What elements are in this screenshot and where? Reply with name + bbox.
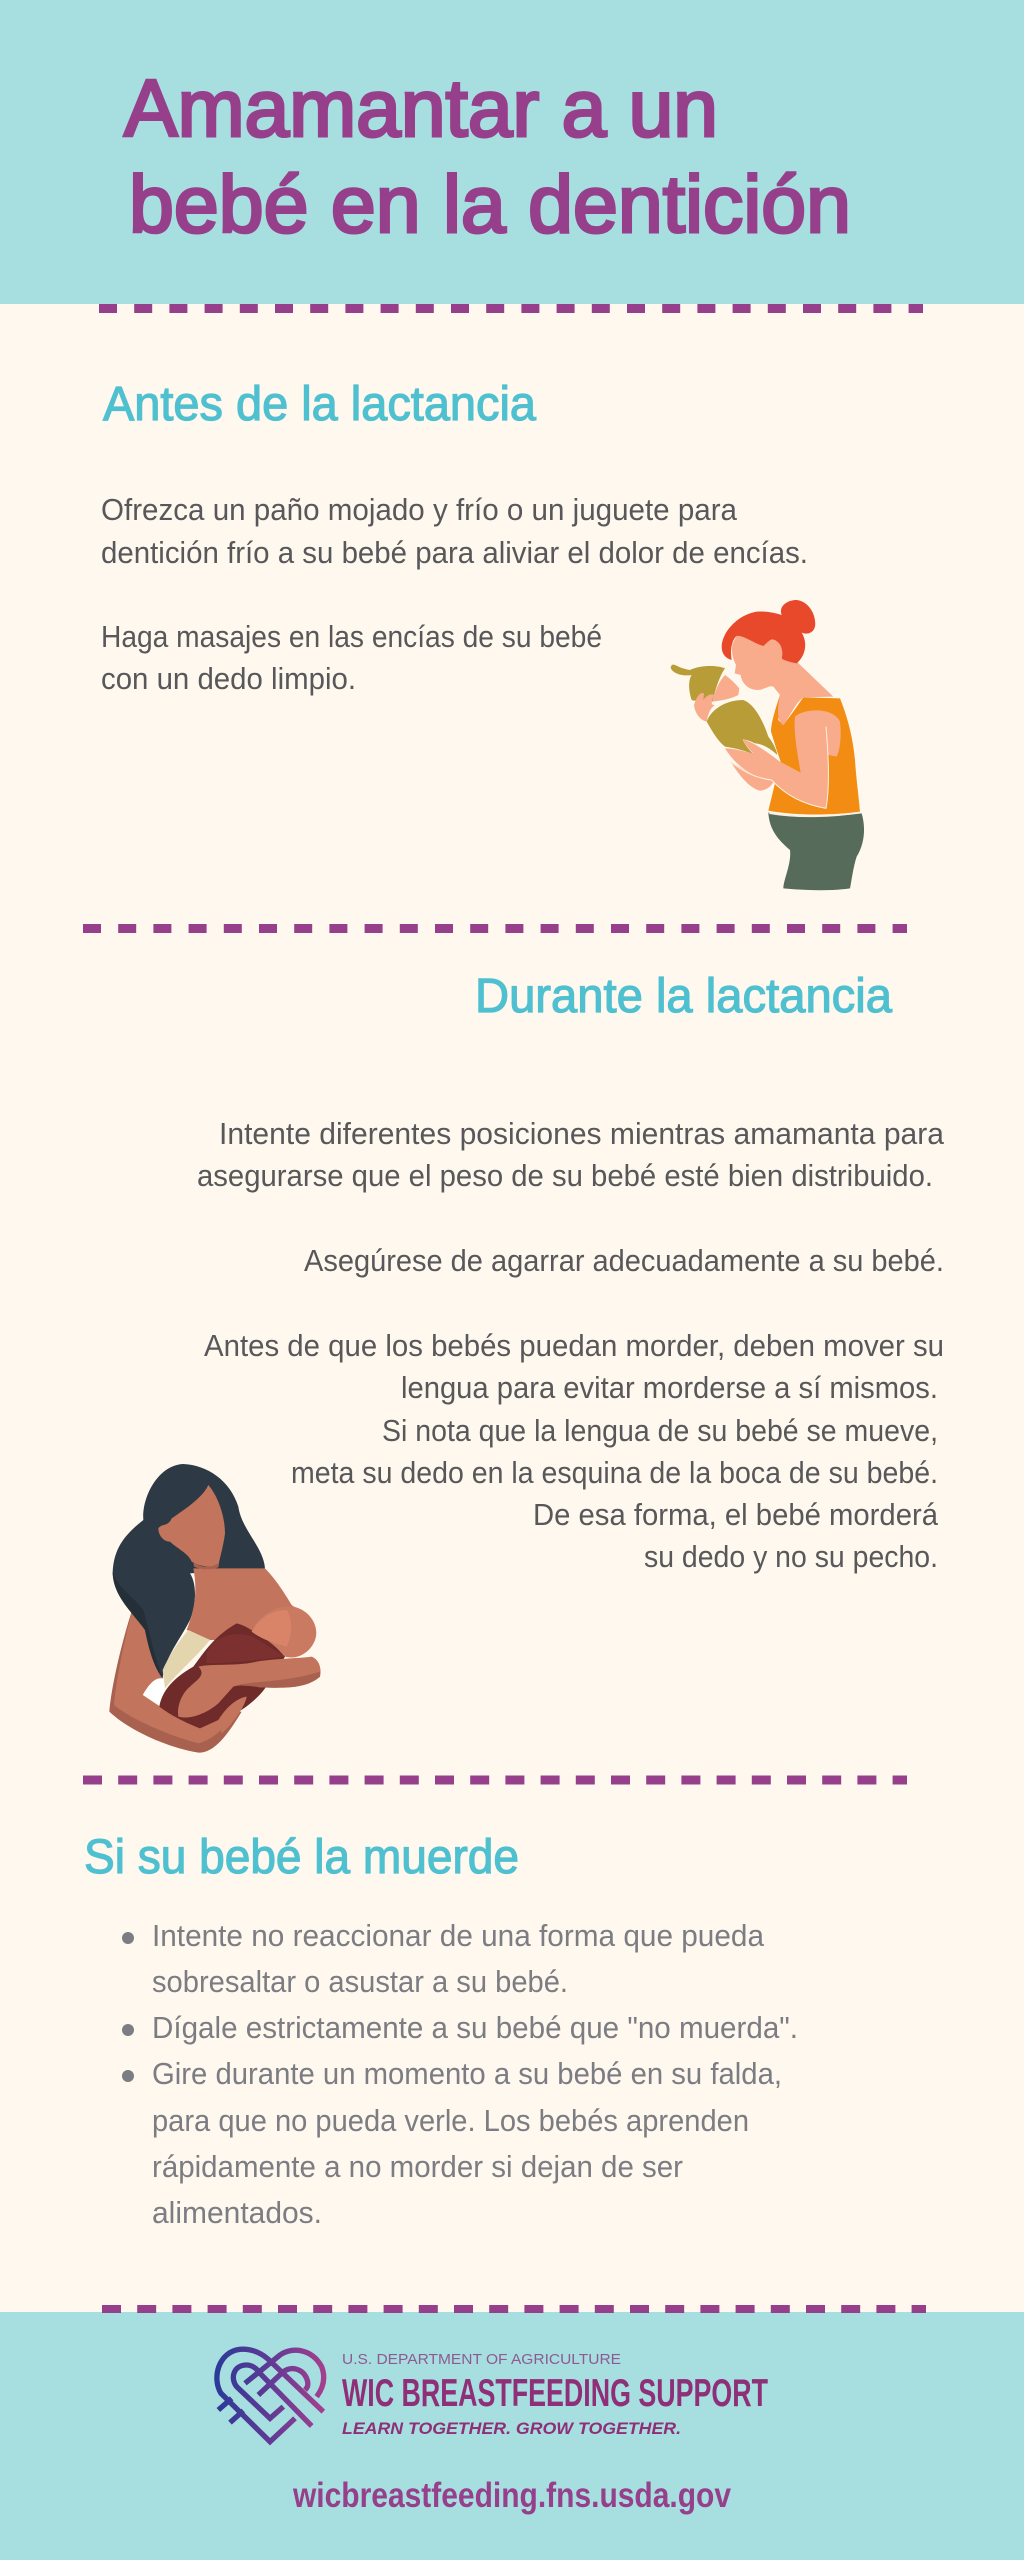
bullet list: sobresaltar o asustar a su bebé.	[152, 1964, 568, 1999]
panel: durante la lactancia	[109, 970, 945, 1753]
title: Amamantar a un	[124, 64, 718, 154]
text block: durante: Si nota que la lengua de su bebé se mueve,	[382, 1413, 938, 1448]
title	[124, 64, 851, 250]
text block: durante: meta su dedo en la esquina de la boca de su bebé.	[291, 1455, 938, 1490]
text block: antes: Ofrezca un paño mojado y frío o un juguete para	[101, 492, 738, 527]
logo text: WIC BREASTFEEDING SUPPORT	[342, 2372, 768, 2415]
text block: durante: De esa forma, el bebé morderá	[533, 1497, 939, 1532]
heading: antes de la lactancia: Antes de la lactancia	[103, 378, 536, 431]
text block: antes: Haga masajes en las encías de su bebé	[101, 619, 602, 654]
header band	[0, 0, 1024, 304]
website url: wicbreastfeeding.fns.usda.gov	[292, 2476, 731, 2515]
heading: durante la lactancia: Durante la lactancia	[475, 970, 892, 1023]
bullet list: Gire durante un momento a su bebé en su falda,	[152, 2056, 782, 2091]
heading: si su bebé la muerde: Si su bebé la muerde	[84, 1831, 519, 1884]
logo text	[342, 2351, 768, 2438]
text block: antes: dentición frío a su bebé para aliviar el dolor de encías.	[101, 535, 808, 570]
text block: durante: lengua para evitar morderse a sí mismos.	[401, 1370, 938, 1405]
title: bebé en la dentición	[129, 160, 851, 250]
logo text: U.S. DEPARTMENT OF AGRICULTURE	[342, 2351, 621, 2368]
bullet list: alimentados.	[152, 2195, 322, 2230]
icon: mother kissing baby	[671, 600, 864, 890]
text block: durante: Intente diferentes posiciones mientras amamanta para	[219, 1116, 945, 1151]
bullet list: para que no pueda verle. Los bebés aprenden	[152, 2103, 749, 2138]
text block: antes: con un dedo limpio.	[101, 661, 356, 696]
text block: durante: Antes de que los bebés puedan morder, deben mover su	[204, 1328, 944, 1363]
icon: mother breastfeeding	[109, 1464, 321, 1753]
panel: si su bebé la muerde	[84, 1831, 798, 2230]
footer band	[0, 2312, 1024, 2560]
bullet list	[122, 1918, 798, 2230]
icon: WIC heart logo	[217, 2349, 324, 2442]
text block: durante: su dedo y no su pecho.	[644, 1539, 938, 1574]
logo text: LEARN TOGETHER. GROW TOGETHER.	[342, 2419, 681, 2438]
text block: durante	[197, 1116, 945, 1574]
bullet list: Intente no reaccionar de una forma que pueda	[152, 1918, 765, 1953]
panel: antes de la lactancia	[101, 378, 864, 890]
text block: durante: Asegúrese de agarrar adecuadamente a su bebé.	[304, 1243, 944, 1278]
bullet list: rápidamente a no morder si dejan de ser	[152, 2149, 683, 2184]
text block: durante: asegurarse que el peso de su bebé esté bien distribuido.	[197, 1158, 933, 1193]
bullet list: Dígale estrictamente a su bebé que "no muerda".	[152, 2010, 798, 2045]
text block: antes	[101, 492, 808, 696]
